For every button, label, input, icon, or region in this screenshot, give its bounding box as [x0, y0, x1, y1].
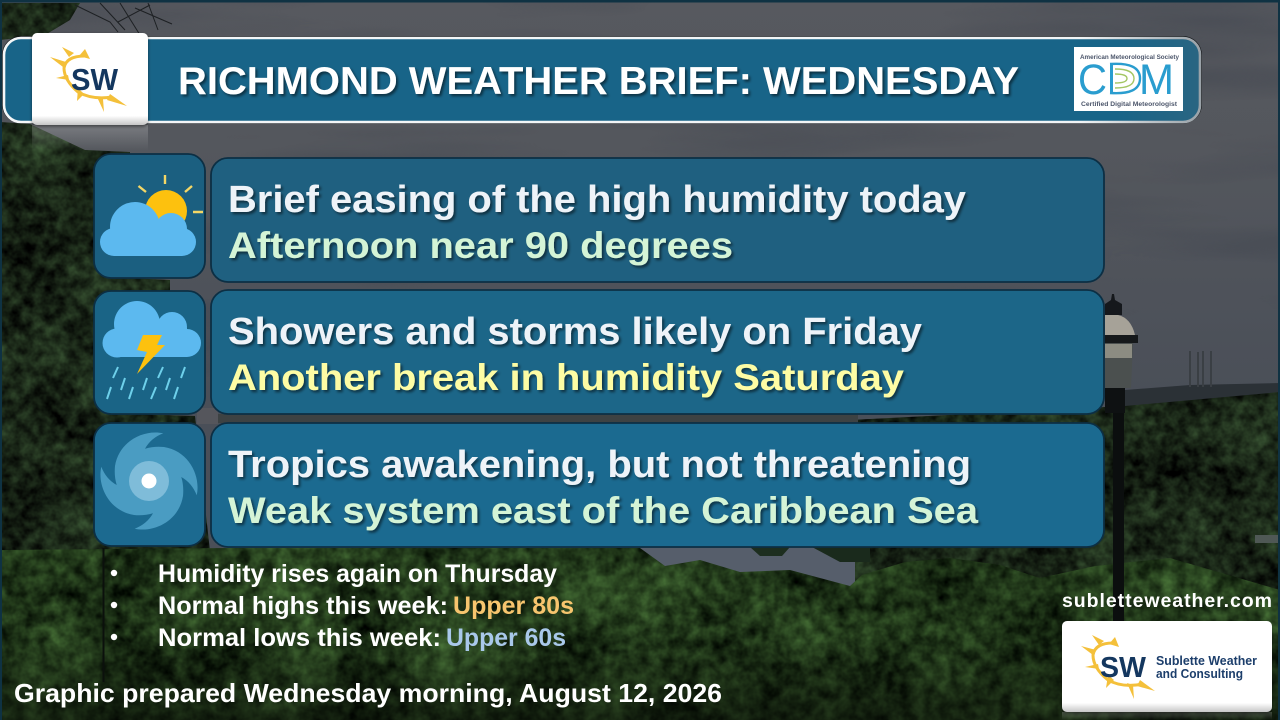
bullet list: humidity and normals — [111, 560, 574, 652]
SW logo in header — [32, 33, 148, 125]
title: RICHMOND WEATHER BRIEF: WEDNESDAY — [178, 60, 1019, 103]
CDM certification badge: C — [1078, 56, 1107, 104]
footer: preparation date: Graphic prepared Wednesday morning, August 12, 2026 — [14, 678, 722, 708]
panel: Friday forecast: Another break in humidity Saturday — [228, 357, 904, 398]
logo card reflection — [1062, 712, 1272, 720]
SW logo in header: SW — [71, 62, 119, 97]
panel: today forecast: Afternoon near 90 degrees — [228, 225, 733, 266]
panel: today forecast: Brief easing of the high humidity today — [228, 179, 966, 221]
CDM certification badge: Certified Digital Meteorologist — [1081, 101, 1178, 108]
icon: sun behind cloud — [100, 175, 203, 256]
panel: today forecast — [211, 158, 1104, 282]
panel: storm icon — [94, 291, 205, 414]
panel: tropics icon — [94, 423, 205, 546]
Sublette Weather logo card: SW — [1100, 652, 1147, 684]
panel: tropics forecast: Weak system east of the Caribbean Sea — [228, 490, 978, 531]
panel: tropics forecast — [211, 423, 1104, 547]
logo reflection — [32, 125, 148, 151]
bullet list: humidity and normals: Upper 80s — [453, 592, 574, 620]
panel: today icon — [94, 154, 205, 278]
Sublette Weather logo card: Sublette Weather — [1156, 653, 1257, 668]
CDM certification badge — [1074, 47, 1183, 111]
lamp post — [1104, 294, 1138, 623]
Sublette Weather logo card — [1062, 621, 1272, 712]
icon: hurricane — [100, 432, 198, 530]
panel: Friday forecast: Showers and storms likely on Friday — [228, 311, 922, 353]
CDM certification badge: M — [1139, 56, 1174, 104]
bullet list: humidity and normals: Normal highs this week: — [158, 592, 448, 620]
header banner — [2, 36, 1202, 124]
CDM certification badge: American Meteorological Society — [1080, 54, 1179, 61]
panel: tropics forecast: Tropics awakening, but not threatening — [228, 444, 971, 486]
bullet list: humidity and normals: Upper 60s — [446, 624, 566, 652]
icon: storm cloud with lightning and rain — [102, 301, 201, 399]
bullet list: humidity and normals: Humidity rises again on Thursday — [158, 560, 557, 588]
website address: subletteweather.com — [1062, 590, 1272, 612]
bullet list: humidity and normals: Normal lows this week: — [158, 624, 441, 652]
panel: Friday forecast — [211, 290, 1104, 414]
Sublette Weather logo card: and Consulting — [1156, 666, 1243, 681]
